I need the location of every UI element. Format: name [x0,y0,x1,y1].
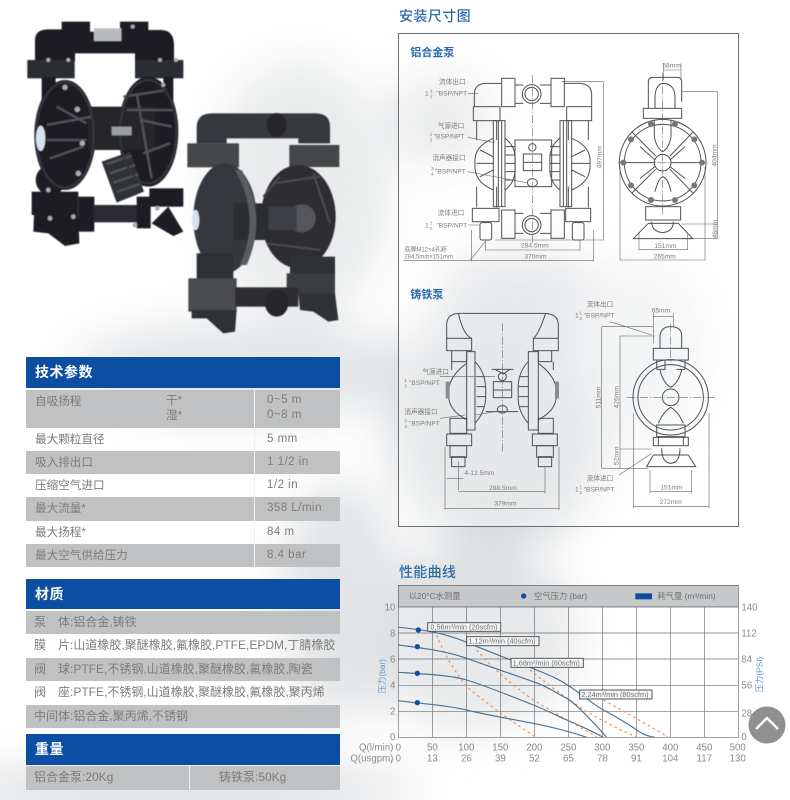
x axis flow labels: 450 [696,743,712,754]
dimension lines [403,63,718,262]
x axis flow labels: 117 [697,754,712,765]
row: compressed air inlet [35,479,298,492]
x axis flow labels: 200 [526,743,542,754]
air consumption dashed curves [437,635,668,737]
panel: weight [26,734,340,790]
row: valve seat: 阀 [34,685,46,699]
row: max particle: 最大颗粒直径 [35,433,105,446]
row: body: 泵 [34,615,46,629]
labels: 265mm [654,253,676,260]
axis titles: 压力(bar) [377,659,387,693]
flow callouts: 1,68m³/min (60scfm) [513,658,580,667]
labels: 404mm [711,144,718,167]
row: max particle [35,433,298,446]
panel: installation drawings frame [398,33,739,527]
row: max air pressure [26,544,340,567]
labels: 4-12.5mm [464,470,495,477]
labels: 1 [404,378,407,383]
x axis flow labels: 300 [594,743,610,754]
heading: installation dimensions: 安装尺寸图 [399,8,471,24]
heading: performance curves: 性能曲线 [399,564,456,580]
row: weights [26,766,340,790]
labels: 消声器接口 [432,153,466,162]
labels: 370mm [524,253,547,260]
labels: 1 [579,485,582,490]
labels: 1 [579,311,582,316]
x axis flow labels: 39 [495,754,506,765]
right axis labels [741,602,757,743]
labels: 消声器接口 [404,407,438,416]
x axis flow labels: 104 [662,754,679,765]
labels: 272mm [660,499,682,506]
x axis flow labels: 0 [396,754,401,765]
labels: 2 [579,490,582,495]
right axis labels: 28 [741,708,752,719]
heading: weight [26,734,340,765]
labels: 流体进口 [587,474,613,483]
plot grid [398,607,738,737]
x axis flow labels: 65 [563,754,574,765]
left axis labels [385,602,396,743]
labels: 2 [404,383,407,388]
x axis flow labels: 0 [396,743,401,754]
labels: 1 [575,313,579,320]
x axis flow labels: 13 [427,754,438,765]
flow callouts: 2,24m³/min (80scfm) [581,690,649,699]
left axis labels: 4 [390,681,396,692]
left axis labels: 8 [390,628,395,639]
x axis flow labels: 500 [730,743,746,754]
row: max head [35,526,295,539]
row: suction and discharge [26,451,340,474]
labels: "BSP/NPT [436,90,467,97]
labels: 2 [430,226,433,231]
labels: 284.5mm×151mm [404,254,453,260]
labels: 4 [431,172,434,177]
x axis flow labels [350,743,746,765]
labels: 151mm [654,243,677,250]
panel: technical parameters [26,357,340,567]
x axis flow labels: 250 [560,743,576,754]
labels: 1 [425,90,429,97]
row: self-priming lift: 干* [166,394,182,407]
row: suction and discharge: 1 1/2 in [267,456,309,468]
bolts [620,121,705,203]
labels: 2 [430,138,433,143]
x axis flow labels: 150 [492,743,508,754]
labels: 48mm [712,219,719,238]
axis titles: 压力(PSI) [754,656,764,692]
drawing: aluminium pump [403,45,719,262]
flow callouts: 0,56m³/min (20scfm) [430,622,498,631]
heading: aluminium pump: 铝合金泵 [410,45,454,59]
labels: 底脚M12×4孔距 [404,246,447,254]
icon: scroll to top button [748,706,786,744]
labels: 497mm [597,146,604,168]
legend bar: 以20°C水测量 [409,591,461,601]
photo: cast iron pump [187,113,339,333]
left axis labels: 2 [390,707,395,718]
labels: 3 [404,419,407,424]
right axis labels: 84 [741,654,753,665]
row: compressed air inlet: 1/2 in [267,479,298,491]
labels: 流体出口 [587,300,613,309]
labels: 流体出口 [439,77,466,86]
labels: 52mm [613,446,620,465]
row: diaphragm: 片:山道橡胶,聚醚橡胶,氟橡胶,PTFE,EPDM,丁腈橡胶 [58,638,335,652]
labels: 1 [430,221,433,226]
row: body [26,611,340,634]
row: self-priming lift: 自吸扬程 [35,395,81,408]
labels: 1 [575,487,579,494]
heading: materials [26,579,340,609]
drawing: cast iron pump [404,287,715,510]
axis titles [377,656,764,693]
x axis flow labels: 130 [730,754,746,765]
labels: "BSP/NPT [434,134,465,141]
labels: "BSP/NPT [436,222,467,229]
x axis flow labels: 26 [461,754,472,765]
row: valve ball: 球:PTFE,不锈钢,山道橡胶,聚醚橡胶,氟橡胶,陶瓷 [58,662,313,676]
labels: 1 [425,222,429,229]
labels [404,63,719,260]
labels: 1 [430,132,433,137]
labels: 511mm [596,386,603,408]
front view [447,313,558,467]
left axis labels: 0 [390,732,395,743]
row: body: 体:铝合金,铸铁 [58,615,137,629]
labels: 2 [430,94,433,99]
labels: 426mm [613,386,620,408]
row: valve seat: 座:PTFE,不锈钢,山道橡胶,聚醚橡胶,氟橡胶,聚丙烯 [58,685,325,699]
labels: 气源进口 [438,121,464,130]
labels: 58mm [662,63,681,70]
right axis labels: 112 [741,628,757,639]
labels: "BSP/NPT [584,313,615,320]
row: max flow [26,497,340,521]
row: center body [26,705,340,728]
row: max flow: 最大流量* [35,502,86,515]
labels: 1 [430,88,433,93]
row: max air pressure: 8.4 bar [267,549,306,561]
chart: performance curves [350,585,764,765]
labels: 4 [404,424,407,429]
side view [633,327,708,467]
panel: materials [26,579,340,728]
side view [619,77,706,239]
front view [472,78,592,240]
labels: "BSP/NPT [435,168,466,175]
legend bar: 耗气量 (m³/min) [657,591,716,601]
row: weights: 铝合金泵:20Kg [34,770,113,784]
flow callouts: 1,12m³/min (40scfm) [468,637,536,646]
row: max head: 最大扬程* [35,526,86,539]
x axis flow labels: 91 [631,754,642,765]
row: max air pressure: 最大空气供给压力 [35,549,128,562]
legend bar: 空气压力 (bar) [534,591,587,601]
left axis labels: 10 [385,602,395,613]
row: max particle: 5 mm [267,433,298,445]
row: max flow: 358 L/min [267,502,322,514]
heading: cast iron pump: 铸铁泵 [410,287,443,301]
photo: aluminium pump [27,22,183,246]
labels: 3 [431,166,434,171]
x axis flow labels: 52 [529,754,540,765]
labels: 2 [579,316,582,321]
row: self-priming lift: 0~5 m [267,394,302,406]
x axis flow labels: 400 [662,743,678,754]
labels: 151mm [660,484,683,491]
labels: 288.5mm [489,485,517,492]
x axis flow labels: 350 [628,743,644,754]
row: self-priming lift: 0~8 m [267,409,302,421]
row: suction and discharge: 吸入排出口 [35,456,93,469]
dimension lines [440,313,715,510]
x axis flow labels: Q(usgpm) [350,754,393,765]
air pressure curves [398,627,655,737]
legend bar [398,585,738,607]
labels [404,300,683,508]
labels: "BSP/NPT [409,380,440,387]
heading: materials: 材质 [35,586,64,602]
row: self-priming lift: 湿* [166,409,182,422]
right axis labels: 140 [741,602,757,613]
heading: technical parameters: 技术参数 [35,364,93,380]
x axis flow labels: Q(l/min) [359,743,393,754]
pump product photos [26,20,340,334]
labels: "BSP/NPT [584,487,615,494]
labels: 流体进口 [438,208,464,217]
right axis labels: 0 [741,732,747,743]
pressure markers [415,627,421,705]
row: compressed air inlet: 压缩空气进口 [35,479,105,492]
flow callouts [428,622,652,699]
row: max head: 84 m [267,526,295,538]
left axis labels: 6 [390,654,395,665]
row: valve ball [26,658,340,681]
labels: 65mm [652,308,671,315]
heading: weight: 重量 [35,741,64,757]
row: weights: 铸铁泵:50Kg [219,770,286,784]
labels: 379mm [494,501,517,508]
labels: "BSP/NPT [409,421,440,428]
labels: 284.5mm [521,243,549,250]
row: diaphragm: 膜 [34,638,46,652]
x axis flow labels: 100 [458,743,474,754]
row: valve ball: 阀 [34,662,46,676]
right axis labels: 56 [741,681,752,692]
x axis flow labels: 78 [597,754,608,765]
row: center body: 中间体:铝合金,聚丙烯,不锈钢 [34,709,188,723]
row: self-priming lift [26,390,340,428]
x axis flow labels: 50 [427,743,438,754]
heading: technical parameters [26,357,340,388]
labels: 气源进口 [422,367,449,376]
